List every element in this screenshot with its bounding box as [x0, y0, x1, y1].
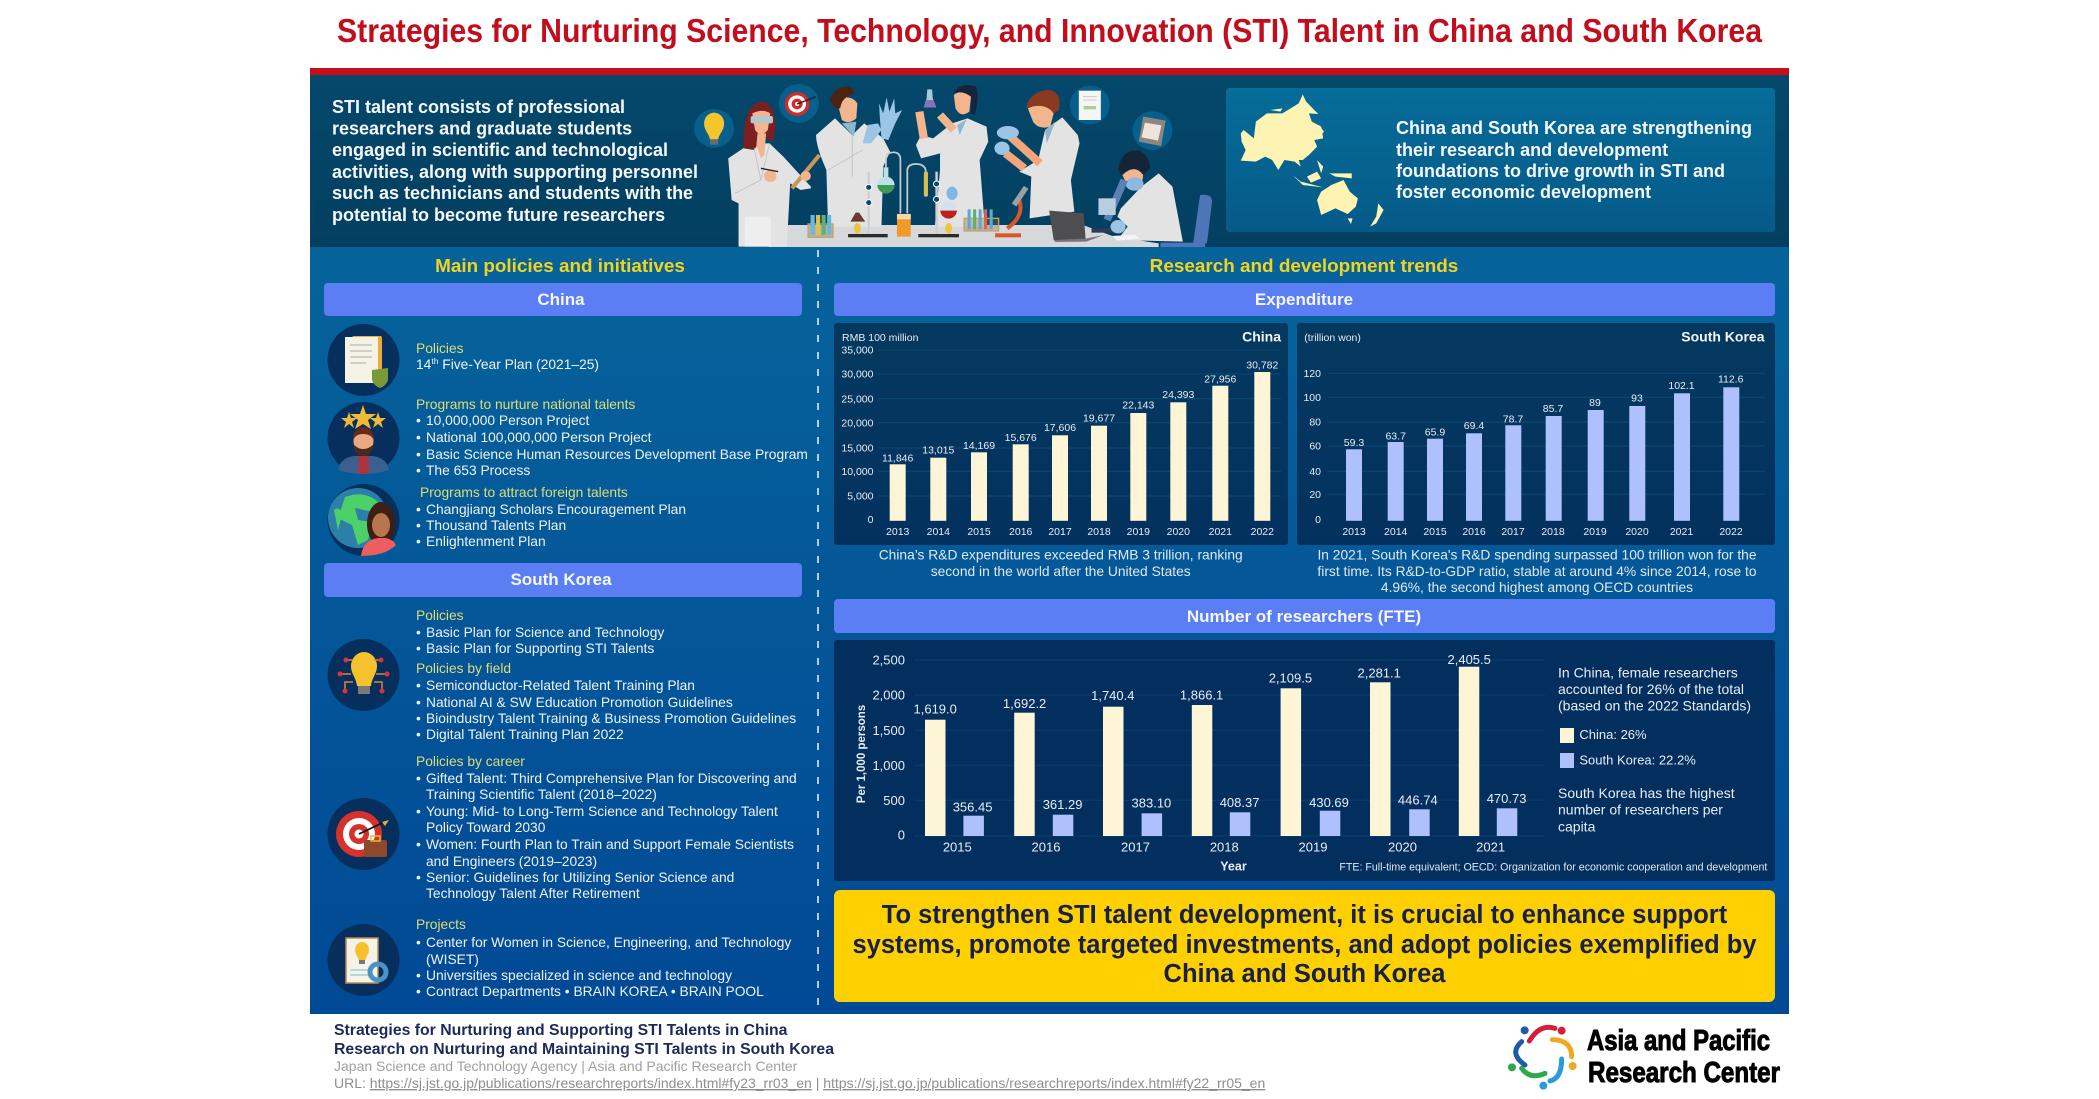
note: researchers per capita: South Korea has the highest — [1558, 785, 1735, 801]
chart: China R&D expenditure: 35,000 — [841, 345, 874, 357]
chart: South Korea R&D expenditure: 80 — [1309, 417, 1321, 429]
chart: number of researchers: 2015 — [943, 839, 972, 854]
text: programs to nurture national talents: Basic Science Human Resources Development Base Program — [426, 447, 808, 462]
text: projects: (WISET) — [426, 952, 479, 967]
text: policies by field — [416, 661, 796, 742]
text: projects: • — [416, 935, 421, 950]
chart: South Korea R&D expenditure: 2019 — [1583, 526, 1607, 538]
chart: South Korea R&D expenditure: 2020 — [1625, 526, 1649, 538]
chart: number of researchers: 1,500 — [872, 723, 905, 738]
text: programs to attract foreign talents: • — [416, 534, 421, 549]
chart: South Korea R&D expenditure: 40 — [1309, 466, 1321, 478]
chart: South Korea R&D expenditure: 102.1 — [1668, 380, 1695, 392]
chart: China R&D expenditure: 10,000 — [841, 466, 874, 478]
chart: South Korea R&D expenditure: 20 — [1309, 489, 1321, 501]
bars: South Korea expenditure — [1346, 387, 1739, 521]
text: policies by career — [416, 754, 797, 901]
header bar: Expenditure — [834, 283, 1775, 316]
footer: sources: URL: https://sj.jst.go.jp/publications/researchreports/index.html#fy23_rr03_en | https://sj.jst.go.jp/publications/researchreports/index.html#fy22_rr05_en — [334, 1075, 1265, 1091]
callout: conclusion — [834, 890, 1775, 1002]
text: policies by career: • — [416, 837, 421, 852]
chart: number of researchers: 1,619.0 — [914, 701, 957, 716]
chart: China R&D expenditure — [834, 323, 1288, 545]
text: projects: Center for Women in Science, Engineering, and Technology — [426, 935, 791, 950]
text: policies by field: • — [416, 711, 421, 726]
woman with flask — [916, 85, 988, 227]
chart: China R&D expenditure: 30,000 — [841, 369, 874, 381]
text: programs to nurture national talents: • — [416, 447, 421, 462]
text: programs to attract foreign talents: Enlightenment Plan — [426, 534, 546, 549]
chart: China R&D expenditure: 22,143 — [1122, 400, 1155, 412]
text: programs to attract foreign talents: Programs to attract foreign talents — [420, 485, 628, 500]
chart: South Korea R&D expenditure: 112.6 — [1718, 374, 1744, 386]
chart: number of researchers: 2019 — [1299, 839, 1327, 854]
text: policies by career: Gifted Talent: Third Comprehensive Plan for Discovering and — [426, 771, 797, 786]
caption: South Korea expenditure: In 2021, South Korea's R&D spending surpassed 100 trillion won for the — [1317, 547, 1757, 562]
text: policies by career: • — [416, 771, 421, 786]
chart: China R&D expenditure: 15,676 — [1005, 432, 1037, 444]
chart: South Korea R&D expenditure: 2022 — [1719, 526, 1743, 538]
text: programs to nurture national talents: • — [416, 430, 421, 445]
chart: number of researchers: 2,405.5 — [1448, 652, 1491, 667]
logo: Asia and Pacific Research Center: Asia and Pacific — [1587, 1025, 1770, 1057]
chart: China R&D expenditure: 20,000 — [841, 417, 874, 429]
icon: Asia-Pacific map — [1241, 94, 1384, 227]
text: policies by field: National AI & SW Education Promotion Guidelines — [426, 695, 733, 710]
icon: bulb circuit — [328, 639, 400, 711]
chart: number of researchers: 2,281.1 — [1358, 665, 1401, 680]
statement text: China and South Korea are strengthening — [1396, 118, 1752, 138]
man with gloves — [816, 86, 902, 227]
text: policies by field: • — [416, 727, 421, 742]
caption: China expenditure: second in the world after the United States — [931, 564, 1191, 579]
text: programs to nurture national talents: Programs to nurture national talents — [416, 397, 635, 412]
footer: sources: Japan Science and Technology Agency | Asia and Pacific Research Center — [334, 1058, 798, 1074]
chart: number of researchers: 356.45 — [953, 799, 992, 814]
chart: South Korea R&D expenditure: 0 — [1315, 514, 1321, 526]
chart: China R&D expenditure: 24,393 — [1162, 389, 1195, 401]
caption: China expenditure: China’s R&D expenditures exceeded RMB 3 trillion, ranking — [879, 547, 1243, 562]
text: policies by career: Senior: Guidelines for Utilizing Senior Science and — [426, 870, 734, 885]
legend: South Korea: 22.2% — [1579, 752, 1696, 767]
statement text: foundations to drive growth in STI and — [1396, 161, 1725, 181]
x axis label: Year — [1220, 860, 1247, 874]
chart: China R&D expenditure: 2013 — [886, 526, 910, 538]
chart: China R&D expenditure: 14,169 — [963, 440, 995, 452]
chart: China R&D expenditure: 2016 — [1009, 526, 1033, 538]
chart: China R&D expenditure: 11,846 — [882, 453, 914, 465]
chart: China R&D expenditure: 0 — [868, 514, 874, 526]
logo: Asia and Pacific Research Center: Research Center — [1588, 1057, 1780, 1089]
chart: South Korea R&D expenditure: 2014 — [1384, 526, 1408, 538]
text: South Korea policies — [416, 608, 664, 656]
chart: China R&D expenditure: 17,606 — [1044, 422, 1076, 434]
chart: South Korea R&D expenditure: 89 — [1589, 397, 1601, 409]
panel: research and development trends — [834, 256, 1775, 1002]
text: policies by career: and Engineers (2019–2023) — [426, 854, 597, 869]
man with pipette — [994, 90, 1080, 218]
text: policies by career: Training Scientific Talent (2018–2022) — [426, 787, 657, 802]
intro text: researchers and graduate students — [332, 118, 632, 138]
header bar: China: China — [537, 290, 585, 309]
intro text: such as technicians and students with the — [332, 183, 693, 203]
chart: South Korea R&D expenditure: 2015 — [1423, 526, 1447, 538]
legend — [1560, 727, 1696, 768]
text: South Korea policies: • — [416, 625, 421, 640]
chart: China R&D expenditure: China — [1242, 328, 1281, 344]
chart: China R&D expenditure: 19,677 — [1083, 412, 1115, 424]
chart: South Korea R&D expenditure: 100 — [1303, 392, 1321, 404]
footer: sources — [334, 1022, 1265, 1091]
text: programs to attract foreign talents: Thousand Talents Plan — [426, 518, 566, 533]
icon: star talent person — [328, 402, 400, 474]
statement text: foster economic development — [1396, 182, 1651, 202]
chart: number of researchers: 430.69 — [1309, 795, 1349, 810]
text: China policies: Five-Year Plan (2021–25) — [438, 357, 599, 372]
chart: South Korea R&D expenditure: 65.9 — [1425, 427, 1445, 439]
chart: China R&D expenditure: 2015 — [967, 526, 991, 538]
heading: R&D trends: Research and development trends — [1150, 256, 1458, 277]
text: South Korea policies: Basic Plan for Supporting STI Talents — [426, 641, 654, 656]
intro text: engaged in scientific and technological — [332, 140, 668, 160]
text: programs to nurture national talents: • — [416, 413, 421, 428]
text: programs to nurture national talents: • — [416, 463, 421, 478]
chart: number of researchers: 1,000 — [872, 758, 905, 773]
icon: project document and gear — [328, 924, 400, 996]
logo: Asia and Pacific Research Center — [1508, 1025, 1780, 1090]
text: projects: Contract Departments • BRAIN KOREA • BRAIN POOL — [426, 984, 764, 999]
chart: number of researchers: 1,866.1 — [1180, 688, 1223, 703]
callout: conclusion: China and South Korea — [1164, 960, 1446, 988]
panel: intro band — [310, 75, 1789, 247]
panel: Asia-Pacific statement — [1226, 88, 1775, 232]
intro text: STI talent consists of professional — [332, 97, 625, 117]
text: policies by career: • — [416, 804, 421, 819]
footer: sources: Strategies for Nurturing and Supporting STI Talents in China — [334, 1022, 788, 1039]
chart: number of researchers: 1,692.2 — [1003, 696, 1046, 711]
bars: China researchers — [925, 667, 1479, 836]
chart: South Korea R&D expenditure — [1297, 323, 1775, 545]
text: policies by career: Women: Fourth Plan to Train and Support Female Scientists — [426, 837, 794, 852]
legend: China: 26% — [1579, 727, 1647, 742]
chart: China R&D expenditure: 2017 — [1048, 526, 1072, 538]
chart: South Korea R&D expenditure: 2021 — [1670, 526, 1693, 538]
chart: China R&D expenditure: 2014 — [927, 526, 950, 538]
text: projects: Projects — [416, 917, 466, 932]
header bar: number of researchers — [834, 599, 1775, 633]
chart: South Korea R&D expenditure: 69.4 — [1464, 420, 1484, 432]
text: programs to attract foreign talents: • — [416, 518, 421, 533]
text: programs to attract foreign talents — [416, 485, 686, 549]
header bar: South Korea: South Korea — [510, 570, 612, 589]
text: policies by field: Digital Talent Training Plan 2022 — [426, 727, 624, 742]
chart: South Korea R&D expenditure: 2013 — [1342, 526, 1366, 538]
chart: number of researchers: 383.10 — [1132, 796, 1171, 811]
bars: China expenditure — [890, 372, 1270, 521]
text: policies by field: Policies by field — [416, 661, 511, 676]
text: programs to nurture national talents — [416, 397, 808, 478]
callout: conclusion: systems, promote targeted investments, and adopt policies exemplified by — [852, 931, 1757, 959]
chart: number of researchers: 1,740.4 — [1091, 688, 1134, 703]
chart: number of researchers: 2018 — [1210, 839, 1239, 854]
chart: China R&D expenditure: 2019 — [1127, 526, 1150, 538]
text: policies by career: Policy Toward 2030 — [426, 820, 546, 835]
footer: sources: Research on Nurturing and Maintaining STI Talents in South Korea — [334, 1041, 834, 1058]
header bar: Expenditure: Expenditure — [1255, 290, 1353, 309]
intro text: potential to become future researchers — [332, 205, 665, 225]
chart: China R&D expenditure: RMB 100 million — [842, 332, 919, 344]
text: South Korea policies: Basic Plan for Science and Technology — [426, 625, 664, 640]
text: projects — [416, 917, 791, 999]
chart: number of researchers: 2,109.5 — [1269, 670, 1312, 685]
chart: South Korea R&D expenditure: South Korea — [1681, 328, 1765, 344]
text: policies by career: • — [416, 870, 421, 885]
text: projects: • — [416, 968, 421, 983]
text: policies by career: Policies by career — [416, 754, 525, 769]
chart: number of researchers: 500 — [883, 793, 905, 808]
text: programs to nurture national talents: 10,000,000 Person Project — [426, 413, 590, 428]
seated man at microscope — [1092, 150, 1183, 242]
header bar: South Korea — [324, 563, 802, 597]
chart: China R&D expenditure: 5,000 — [847, 491, 874, 503]
chart: number of researchers: 2016 — [1032, 839, 1060, 854]
chart: South Korea R&D expenditure: 2016 — [1462, 526, 1486, 538]
chart: number of researchers: 2021 — [1476, 839, 1505, 854]
chart: China R&D expenditure: 27,956 — [1204, 373, 1237, 385]
chart: number of researchers: 2,500 — [872, 653, 905, 668]
chart: South Korea R&D expenditure: 2018 — [1541, 526, 1565, 538]
chart: South Korea R&D expenditure: 85.7 — [1543, 403, 1563, 415]
note: researchers per capita: number of researchers per — [1558, 802, 1723, 818]
chart: number of researchers: 2020 — [1388, 839, 1417, 854]
footnote: FTE: Full-time equivalent; OECD: Organization for economic cooperation and development — [1339, 862, 1767, 874]
chart: number of researchers: 2017 — [1121, 839, 1150, 854]
note: researchers per capita: capita — [1558, 818, 1596, 834]
title: Strategies for Nurturing Science, Technology, and Innovation (STI) Talent in China and South Korea — [337, 12, 1763, 49]
chart: number of researchers: 0 — [898, 828, 905, 843]
note: female researchers: accounted for 26% of the total — [1558, 681, 1744, 697]
y axis label: Per 1,000 persons — [856, 705, 868, 803]
panel: main background — [310, 247, 1789, 1014]
chart: number of researchers: 2,000 — [872, 688, 905, 703]
text: projects: Universities specialized in science and technology — [426, 968, 732, 983]
chart: South Korea R&D expenditure: (trillion won) — [1304, 332, 1361, 344]
icon: target and briefcase — [328, 798, 400, 870]
text: China policies — [416, 341, 599, 372]
callout: conclusion: To strengthen STI talent development, it is crucial to enhance support — [882, 901, 1728, 929]
text: policies by field: Bioindustry Talent Training & Business Promotion Guidelines — [426, 711, 796, 726]
text: China policies: th — [431, 356, 439, 366]
chart: number of researchers: 470.73 — [1487, 791, 1526, 806]
text: South Korea policies: • — [416, 641, 421, 656]
chart: China R&D expenditure: 2020 — [1167, 526, 1190, 538]
icon: policy document — [328, 324, 400, 396]
panel: main policies and initiatives — [324, 256, 808, 999]
text: programs to attract foreign talents: Changjiang Scholars Encouragement Plan — [426, 502, 686, 517]
text: policies by career: Technology Talent After Retirement — [426, 886, 640, 901]
chart: number of researchers: 408.37 — [1220, 795, 1259, 810]
text: China policies: Policies — [416, 341, 464, 356]
chart: South Korea R&D expenditure: 2017 — [1501, 526, 1525, 538]
chart: China R&D expenditure: 25,000 — [841, 393, 874, 405]
header bar: China — [324, 283, 802, 316]
chart: South Korea R&D expenditure: 78.7 — [1503, 414, 1523, 426]
illustration: scientists in a laboratory — [694, 84, 1212, 247]
text: China policies: 14 — [416, 357, 431, 372]
chart: South Korea R&D expenditure: 59.3 — [1344, 437, 1364, 449]
chart: China R&D expenditure: 2018 — [1087, 526, 1111, 538]
chart: South Korea R&D expenditure: 60 — [1309, 441, 1321, 453]
chart: South Korea R&D expenditure: 120 — [1303, 368, 1321, 380]
chart: South Korea R&D expenditure: 93 — [1631, 393, 1643, 405]
chart: China R&D expenditure: 13,015 — [922, 444, 955, 456]
chart: number of researchers: 361.29 — [1043, 797, 1082, 812]
chart: number of researchers: 446.74 — [1398, 793, 1438, 808]
text: projects: • — [416, 984, 421, 999]
chart: China R&D expenditure: 2022 — [1251, 526, 1274, 538]
text: programs to attract foreign talents: • — [416, 502, 421, 517]
chart: number of researchers — [834, 640, 1775, 881]
chart: China R&D expenditure: 30,782 — [1246, 359, 1279, 371]
caption: South Korea expenditure: first time. Its R&D-to-GDP ratio, stable at around 4% since 2014, rose to — [1317, 564, 1757, 579]
text: policies by field: • — [416, 695, 421, 710]
text: policies by field: Semiconductor-Related Talent Training Plan — [426, 678, 695, 693]
intro text: activities, along with supporting personnel — [332, 162, 698, 182]
header bar: number of researchers: Number of researchers (FTE) — [1187, 607, 1421, 626]
heading: main policies: Main policies and initiatives — [435, 256, 685, 277]
chart: China R&D expenditure: 2021 — [1209, 526, 1232, 538]
note: female researchers: In China, female researchers — [1558, 664, 1738, 680]
statement text: their research and development — [1396, 140, 1668, 160]
chart: South Korea R&D expenditure: 63.7 — [1385, 431, 1406, 443]
icon: globe and woman — [328, 484, 400, 556]
text: policies by career: Young: Mid- to Long-Term Science and Technology Talent — [426, 804, 778, 819]
text: programs to nurture national talents: The 653 Process — [426, 463, 530, 478]
text: programs to nurture national talents: National 100,000,000 Person Project — [426, 430, 652, 445]
red rule — [310, 68, 1789, 75]
chart: China R&D expenditure: 15,000 — [841, 443, 874, 455]
text: South Korea policies: Policies — [416, 608, 464, 623]
text: policies by field: • — [416, 678, 421, 693]
caption: South Korea expenditure: 4.96%, the second highest among OECD countries — [1381, 580, 1693, 595]
note: female researchers: (based on the 2022 Standards) — [1558, 698, 1751, 714]
woman with clipboard — [728, 102, 819, 247]
bars: South Korea researchers — [963, 808, 1517, 836]
